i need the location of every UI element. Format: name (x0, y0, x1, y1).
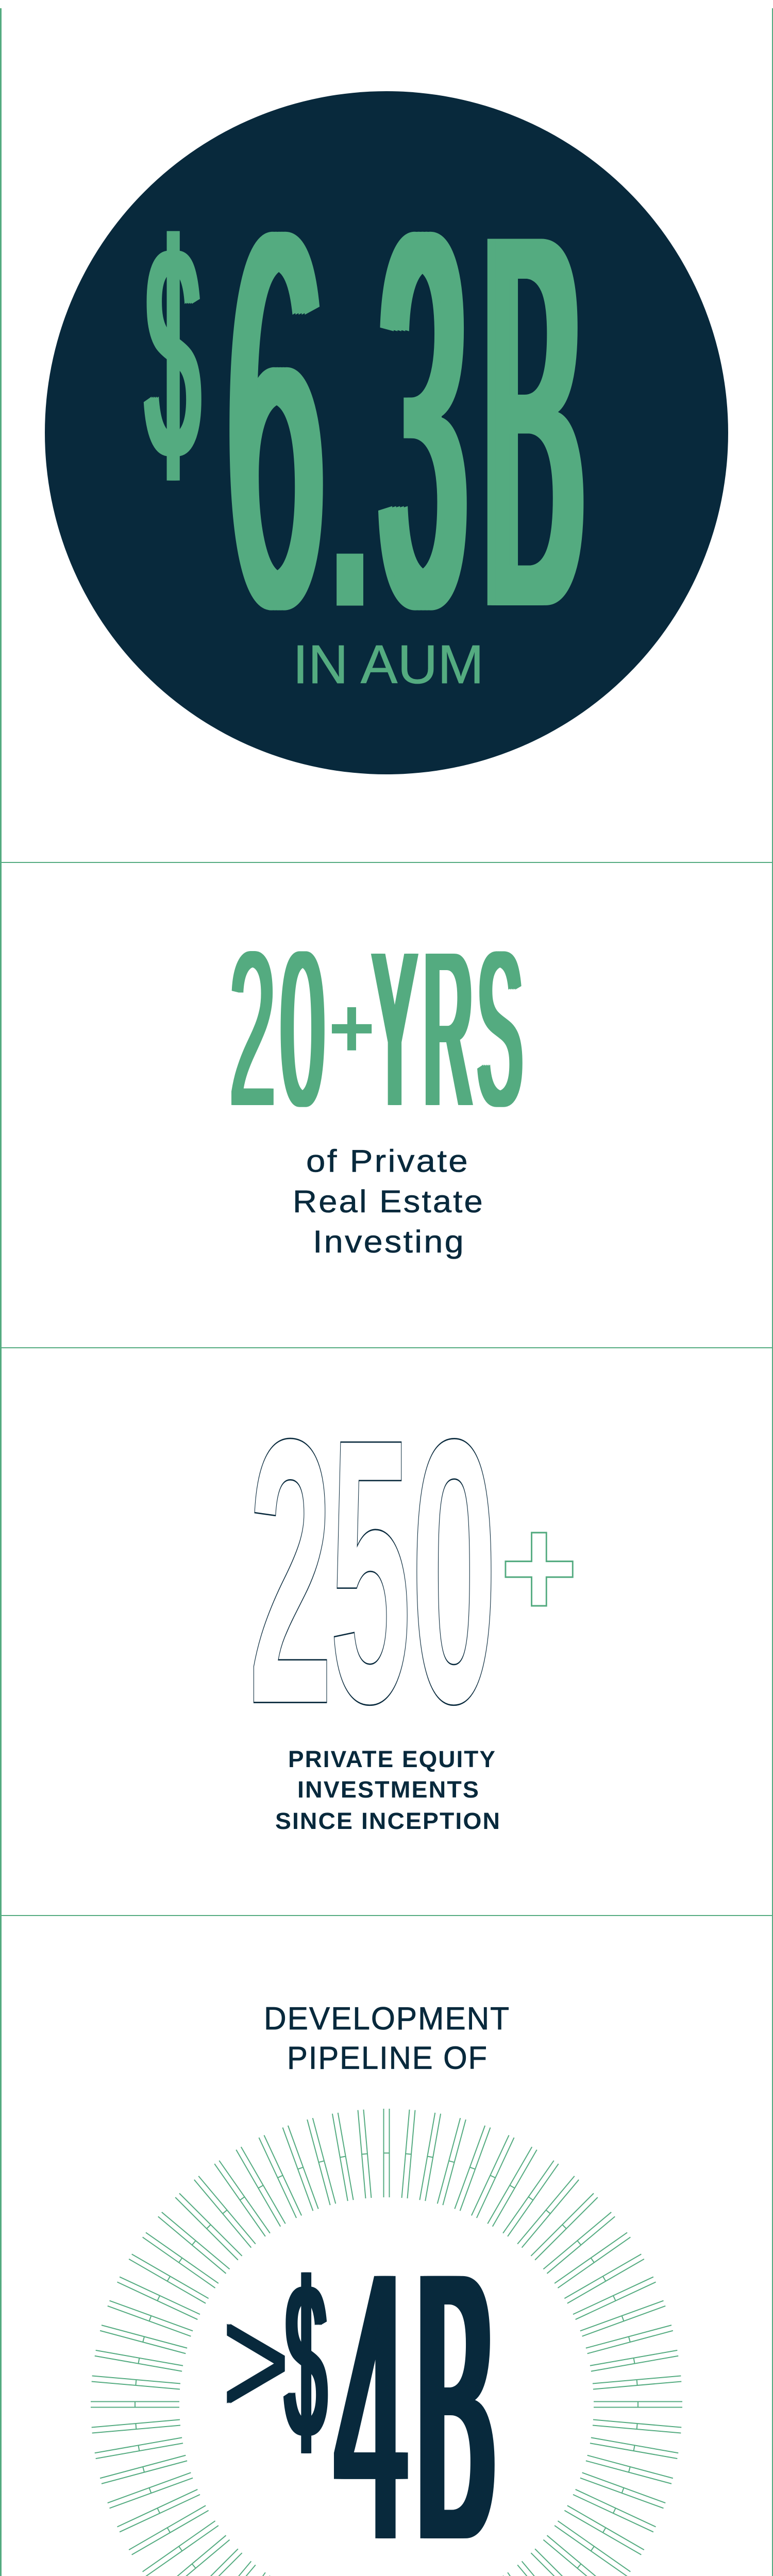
navy circle background (45, 91, 728, 774)
big number $6.3B: . (311, 168, 389, 713)
outlined number 250+: 2 (248, 1361, 333, 1783)
text: private equity investments since inception: PRIVATE EQUITY (288, 1746, 496, 1772)
text: of private real estate investing (293, 1144, 484, 1259)
text: of private real estate investing: of Private (306, 1144, 469, 1179)
big number >$4B (223, 2195, 495, 2576)
big number $6.3B (143, 124, 583, 723)
outlined number 250+ (248, 1360, 578, 1783)
outlined number 250+: 5 (330, 1360, 411, 1782)
big number 20+YRS: 0 (281, 907, 325, 1154)
big number $6.3B: 3 (380, 124, 466, 723)
caption: in AUM: IN AUM (293, 634, 484, 695)
big number $6.3B: B (483, 126, 583, 723)
radial tick ring (87, 2105, 686, 2576)
big number $6.3B: $ (146, 182, 199, 527)
text: of private real estate investing: Investing (313, 1224, 465, 1259)
text: of private real estate investing: Real Estate (293, 1184, 484, 1219)
text: private equity investments since inception: INVESTMENTS (297, 1776, 480, 1803)
text: private equity investments since inception (275, 1746, 501, 1834)
outlined number 250+: 0 (411, 1360, 497, 1782)
outlined number 250+: + (500, 1487, 578, 1648)
heading: development pipeline of (264, 2001, 510, 2076)
heading: development pipeline of: DEVELOPMENT (264, 2001, 510, 2037)
big number $6.3B: 6 (227, 124, 325, 723)
heading: development pipeline of: PIPELINE OF (287, 2040, 488, 2076)
big number 20+YRS: R (424, 907, 473, 1154)
big number 20+YRS: + (329, 981, 375, 1076)
big number 20+YRS: 2 (229, 907, 276, 1154)
big number >$4B: > (223, 2274, 289, 2450)
big number 20+YRS: S (478, 907, 522, 1154)
big number 20+YRS: Y (374, 907, 416, 1154)
big number >$4B: $ (285, 2237, 326, 2487)
big number 20+YRS (229, 907, 523, 1154)
text: private equity investments since inception: SINCE INCEPTION (275, 1808, 501, 1834)
